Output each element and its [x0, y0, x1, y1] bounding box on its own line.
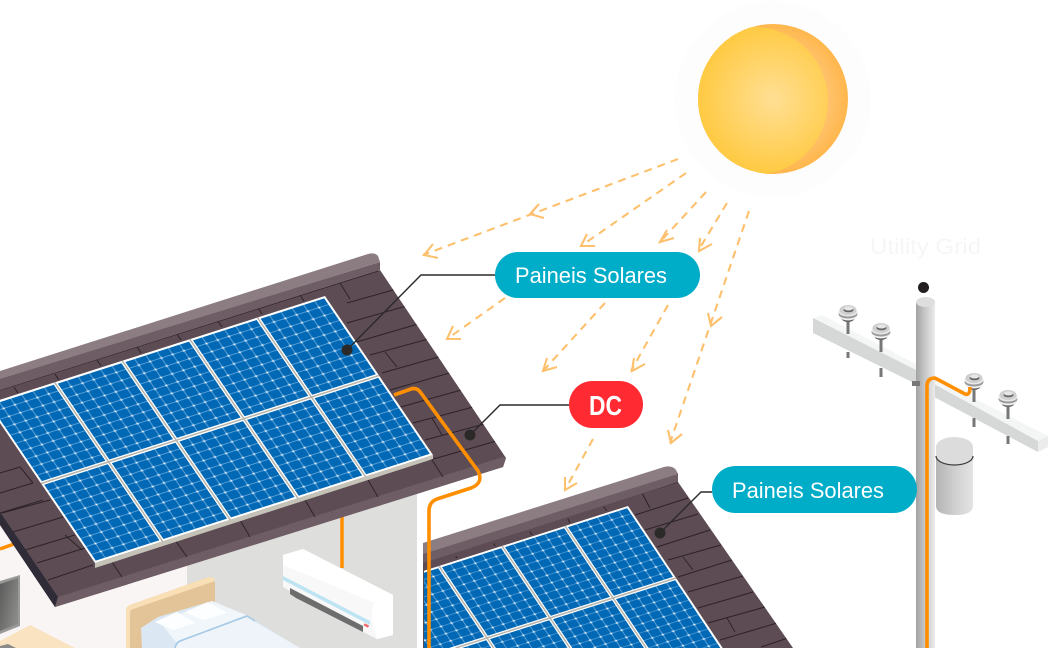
roof shingle lines: [0, 271, 500, 580]
orange wire: descent over second roof: [427, 528, 431, 648]
pole shaft: [916, 297, 935, 648]
callout: Paineis Solares second roof: Paineis Solares: [732, 478, 884, 503]
roof dark side edge: [0, 512, 58, 607]
orange wire: inside wall: [0, 510, 342, 568]
air conditioner: [283, 549, 393, 639]
house walls: [0, 480, 417, 648]
roof ridge band: [0, 262, 380, 390]
orange wire on pole: [927, 378, 970, 648]
insulator 2: [872, 323, 890, 377]
insulator 1: [838, 305, 858, 358]
roof: main house: [0, 253, 506, 607]
callout: Paineis Solares main roof: Paineis Solares: [515, 263, 667, 288]
crossarm bracket: [912, 381, 920, 386]
sun rays: [423, 159, 749, 490]
bed: [126, 577, 300, 648]
utility pole: [813, 282, 1048, 648]
second roof ridge band: [423, 473, 678, 563]
sun: [698, 24, 848, 174]
pole left crossarm: [813, 315, 916, 384]
second roof shingle lines: [423, 482, 788, 647]
insulator 3: [964, 373, 984, 427]
callout: Paineis Solares second roof: [654, 466, 917, 538]
callout: Paineis Solares main roof: [342, 252, 700, 356]
roof: second house: [423, 466, 793, 648]
pole top marker: [918, 282, 929, 293]
solar panel array: main roof: [0, 296, 433, 568]
insulator 4: [998, 390, 1018, 444]
monitor: [0, 575, 20, 634]
pole right crossarm: [934, 378, 1048, 452]
callout: DC: DC: [589, 390, 622, 421]
roof lower fascia: [55, 457, 506, 607]
second solar panel array: [424, 506, 723, 648]
callout: DC: [464, 381, 643, 440]
utility grid label: Utility Grid: [870, 234, 981, 259]
orange wire: roof to second roof: [394, 388, 480, 530]
desk: [0, 625, 75, 648]
transformer: [936, 437, 973, 515]
